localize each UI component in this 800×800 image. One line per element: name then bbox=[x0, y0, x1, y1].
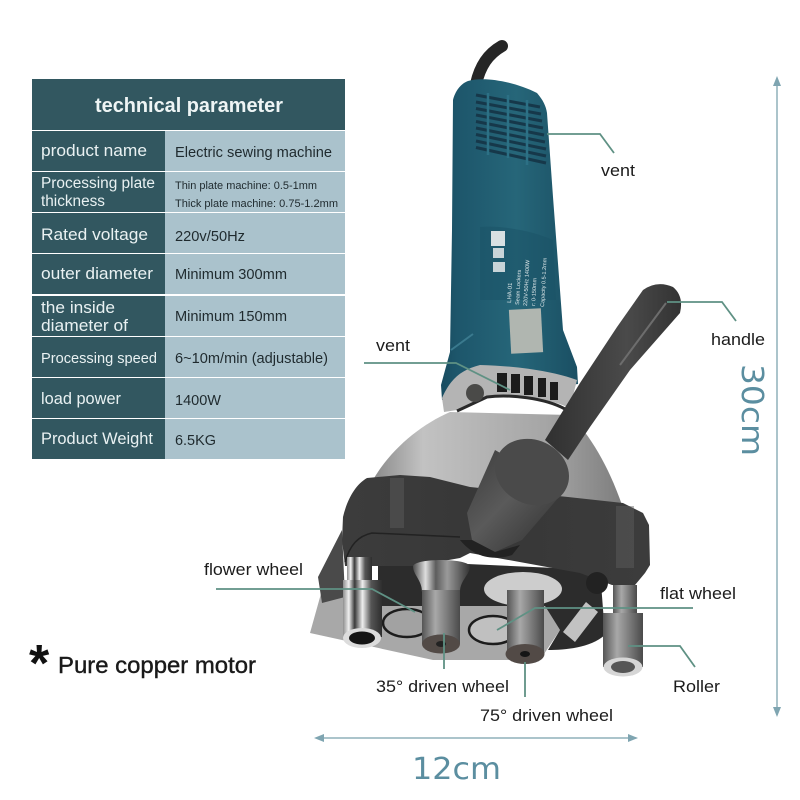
row: product weight: 6.5KG bbox=[175, 433, 216, 449]
label: vent top: vent bbox=[601, 161, 635, 180]
label: handle bbox=[667, 302, 765, 349]
callout: pure copper motor: * bbox=[29, 635, 50, 693]
row: processing plate thickness: Thick plate machine: 0.75-1.2mm bbox=[175, 198, 338, 210]
label: 75 degree driven wheel bbox=[480, 662, 613, 725]
illustration: electric sewing machine bbox=[310, 46, 681, 676]
dark recess and shadow under housing bbox=[378, 560, 605, 650]
dimension: height 30cm: 30cm bbox=[734, 364, 769, 456]
row: load power: 1400W bbox=[175, 393, 221, 409]
small oval wheels bbox=[383, 609, 431, 637]
75 degree wheel bbox=[484, 572, 562, 664]
silver base plate bbox=[310, 590, 560, 660]
row: load power: load power bbox=[41, 390, 121, 408]
row: load power bbox=[32, 378, 345, 418]
collar with vent slots bbox=[442, 365, 577, 412]
label: 35 degree driven wheel: 35° driven wheel bbox=[376, 677, 509, 696]
nameplate: 220V-50Hz 1400W bbox=[523, 259, 531, 306]
dimension: height 30cm bbox=[734, 76, 781, 717]
panel: technical parameter table bbox=[32, 79, 345, 459]
row: product name bbox=[32, 131, 345, 171]
nameplate: LHA-01 bbox=[507, 282, 514, 303]
35 degree wheel bbox=[413, 560, 470, 654]
housing arch bbox=[345, 533, 460, 562]
callout: pure copper motor: Pure copper motor bbox=[58, 652, 256, 678]
row: processing plate thickness: Processing plate bbox=[41, 175, 155, 192]
label: roller: Roller bbox=[673, 677, 720, 696]
row: outer diameter: Minimum 300mm bbox=[175, 267, 287, 283]
label: flower wheel: flower wheel bbox=[204, 560, 303, 579]
motor body bbox=[441, 79, 578, 400]
silver dome bbox=[373, 412, 622, 530]
handle knob bbox=[460, 427, 580, 558]
nameplate: Capacity 0.5-1.2mm bbox=[540, 257, 549, 307]
row: product name: Electric sewing machine bbox=[175, 145, 332, 161]
row: processing speed bbox=[32, 337, 345, 377]
row: processing speed: 6~10m/min (adjustable) bbox=[175, 351, 328, 367]
row: rated voltage: Rated voltage bbox=[41, 225, 148, 244]
label: flat wheel: flat wheel bbox=[660, 584, 736, 603]
power cable bbox=[476, 46, 502, 84]
roller bbox=[603, 585, 643, 676]
row: outer diameter: outer diameter bbox=[41, 264, 153, 283]
callout: pure copper motor bbox=[29, 635, 256, 693]
row: inside diameter: diameter of bbox=[41, 316, 128, 335]
label: handle: handle bbox=[711, 330, 765, 349]
label: 75 degree driven wheel: 75° driven wheel bbox=[480, 706, 613, 725]
row: product name: product name bbox=[41, 141, 147, 160]
label: vent left: vent bbox=[376, 336, 410, 355]
row: outer diameter bbox=[32, 254, 345, 294]
table heading: technical parameter bbox=[95, 95, 283, 117]
nameplate bbox=[491, 231, 549, 354]
row: rated voltage: 220v/50Hz bbox=[175, 229, 245, 245]
row: inside diameter bbox=[32, 296, 345, 336]
row: processing plate thickness: thickness bbox=[41, 193, 105, 210]
label: flat wheel bbox=[497, 584, 736, 630]
silver pointed wheel bbox=[563, 602, 598, 642]
flower wheel pin bbox=[343, 557, 382, 648]
row: processing speed: Processing speed bbox=[41, 351, 157, 367]
label: roller bbox=[628, 646, 720, 696]
label: flower wheel bbox=[204, 560, 415, 612]
row: product weight: Product Weight bbox=[41, 430, 153, 448]
nameplate: Seam Lockers bbox=[515, 269, 523, 305]
row: processing plate thickness: Thin plate machine: 0.5-1mm bbox=[175, 180, 317, 192]
handle bbox=[545, 284, 681, 460]
dark housing bbox=[342, 475, 650, 585]
table heading bbox=[32, 79, 345, 130]
dimension: width 12cm bbox=[314, 734, 638, 787]
top vent slots bbox=[476, 93, 546, 165]
label: 35 degree driven wheel bbox=[376, 633, 509, 696]
row: product weight bbox=[32, 419, 345, 459]
bolt bbox=[586, 572, 608, 594]
row: processing plate thickness bbox=[32, 172, 345, 212]
label: vent left bbox=[364, 336, 510, 390]
row: inside diameter: the inside bbox=[41, 298, 115, 317]
dimension: width 12cm: 12cm bbox=[412, 752, 501, 787]
row: rated voltage bbox=[32, 213, 345, 253]
row: inside diameter: Minimum 150mm bbox=[175, 309, 287, 325]
left side bracket bbox=[318, 530, 345, 603]
nameplate: r: 0-150mm bbox=[531, 277, 538, 306]
label: vent top bbox=[547, 134, 635, 180]
